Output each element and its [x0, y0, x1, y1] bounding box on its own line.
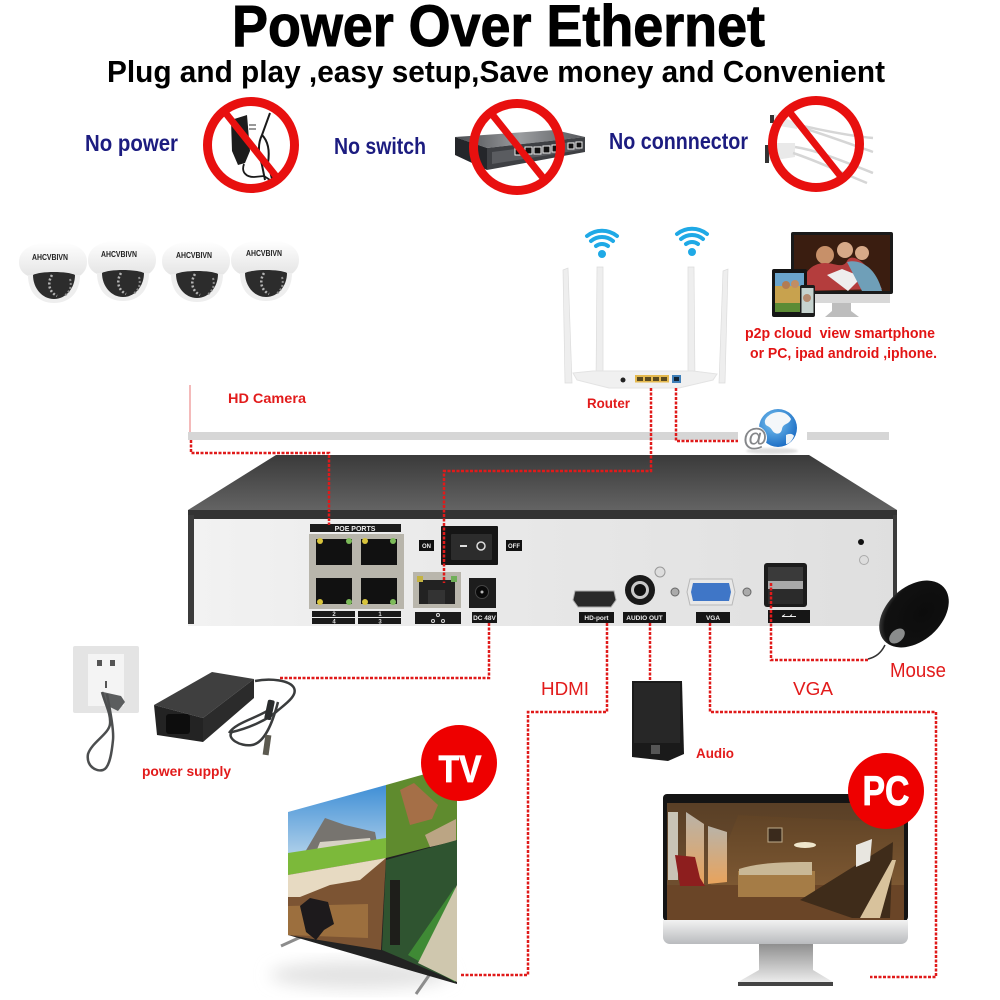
port numbers	[312, 611, 401, 626]
camera 1	[19, 242, 87, 303]
network cable bar left	[188, 432, 738, 440]
monitor stand	[738, 944, 833, 986]
icon: prohibition sign	[474, 104, 560, 190]
mouse label: Mouse	[890, 660, 946, 682]
audio label	[623, 612, 666, 623]
smartphone	[800, 285, 815, 317]
label: no power: No power	[85, 130, 178, 156]
router	[563, 229, 728, 388]
port numbers: 2	[332, 612, 336, 618]
label: no connector: No connnector	[609, 128, 748, 154]
camera 3	[162, 241, 230, 302]
power port	[620, 378, 626, 382]
monitor room scene	[667, 803, 904, 920]
port numbers: 1	[378, 612, 382, 618]
usb label	[768, 610, 810, 623]
lan label	[415, 612, 461, 624]
router label: Router	[587, 395, 631, 411]
lan port	[413, 572, 461, 608]
bottom left pane	[288, 858, 386, 950]
hdmi label: HD-port	[584, 615, 609, 622]
icon: poe splitter cables	[765, 114, 873, 183]
speaker	[632, 681, 684, 761]
top right pane	[386, 765, 457, 858]
subtitle: Plug and play ,easy setup,Save money and Convenient	[107, 54, 885, 89]
poe jacks	[316, 539, 397, 604]
tv shadow	[270, 961, 450, 989]
hd camera label: HD Camera	[228, 390, 306, 406]
p2p text: or PC, ipad android ,iphone.	[750, 345, 937, 362]
off label: OFF	[508, 544, 520, 550]
dc label	[472, 612, 497, 623]
pc badge	[848, 753, 924, 829]
tv bezel	[288, 840, 457, 984]
camera 4	[231, 240, 299, 301]
power switch	[441, 526, 498, 565]
power supply label: power supply	[142, 763, 231, 779]
audio label: AUDIO OUT	[626, 615, 663, 622]
audio label: Audio	[696, 745, 734, 761]
pc badge: PC	[862, 767, 910, 814]
icon: prohibition sign	[772, 100, 860, 188]
tv stand	[281, 936, 430, 994]
hdmi label	[579, 612, 614, 623]
monitor chin	[663, 920, 908, 944]
red connection lines	[191, 388, 936, 977]
wifi icon left	[587, 231, 617, 256]
wan port	[672, 375, 681, 383]
usb ports	[764, 563, 807, 607]
ground symbol	[655, 567, 665, 577]
lan ports	[635, 375, 669, 382]
poe ports	[309, 524, 404, 626]
icon: prohibition sign	[208, 102, 294, 188]
vga label: VGA	[793, 679, 833, 699]
off label	[506, 540, 522, 551]
tv badge	[421, 725, 497, 801]
antennas	[563, 267, 728, 383]
hdmi label: HDMI	[541, 679, 589, 699]
wall socket	[73, 646, 139, 770]
vga label	[696, 612, 730, 623]
camera 2	[88, 240, 156, 301]
camera 1: AHCVBIVN	[32, 253, 68, 262]
camera 2: AHCVBIVN	[101, 250, 137, 259]
router body	[573, 371, 717, 388]
no switch item	[334, 104, 585, 190]
network cable bar right	[807, 432, 889, 440]
p2p text	[745, 325, 937, 362]
icon: network switch	[455, 130, 585, 170]
poe metal block	[309, 534, 404, 609]
internet globe icon	[743, 409, 798, 454]
port numbers: 3	[378, 620, 382, 626]
nvr rear panel	[188, 519, 897, 626]
devices illustration	[772, 232, 893, 317]
nvr top edge	[188, 510, 897, 520]
vga label: VGA	[706, 615, 720, 622]
tablet	[772, 269, 807, 317]
tv badge: TV	[438, 749, 482, 791]
desktop computer	[663, 753, 924, 986]
poe leds	[317, 538, 396, 605]
vga port	[671, 579, 751, 605]
nvr side edge right	[893, 515, 897, 624]
icon: wall adapter	[231, 113, 272, 180]
p2p text: p2p cloud view smartphone	[745, 325, 935, 342]
desktop monitor	[791, 232, 893, 317]
camera 4: AHCVBIVN	[246, 249, 282, 258]
hdmi port	[573, 591, 616, 607]
ground mark	[860, 556, 868, 564]
nvr side edge left	[188, 515, 194, 624]
port numbers: 4	[332, 620, 336, 626]
nvr top cover	[188, 455, 897, 519]
no power item	[85, 102, 294, 188]
mouse	[866, 567, 962, 661]
nvr recorder	[188, 455, 897, 626]
dc label: DC 48V	[473, 615, 497, 622]
internet globe icon: @	[743, 424, 767, 452]
power adapter	[154, 672, 295, 755]
top left pane	[288, 785, 386, 875]
on label: ON	[422, 544, 431, 550]
poe label: POE PORTS	[335, 526, 376, 533]
no connector item	[609, 100, 873, 188]
indicator hole	[858, 539, 864, 545]
monitor frame	[663, 794, 908, 921]
label: no switch: No switch	[334, 133, 426, 159]
audio port	[625, 575, 655, 605]
hd camera riser	[189, 385, 191, 432]
bottom right pane	[382, 840, 457, 982]
television	[270, 725, 497, 994]
wifi icon right	[677, 229, 707, 254]
on label	[419, 540, 434, 551]
cameras	[19, 240, 299, 303]
dc jack	[469, 578, 496, 608]
camera 3: AHCVBIVN	[176, 251, 212, 260]
